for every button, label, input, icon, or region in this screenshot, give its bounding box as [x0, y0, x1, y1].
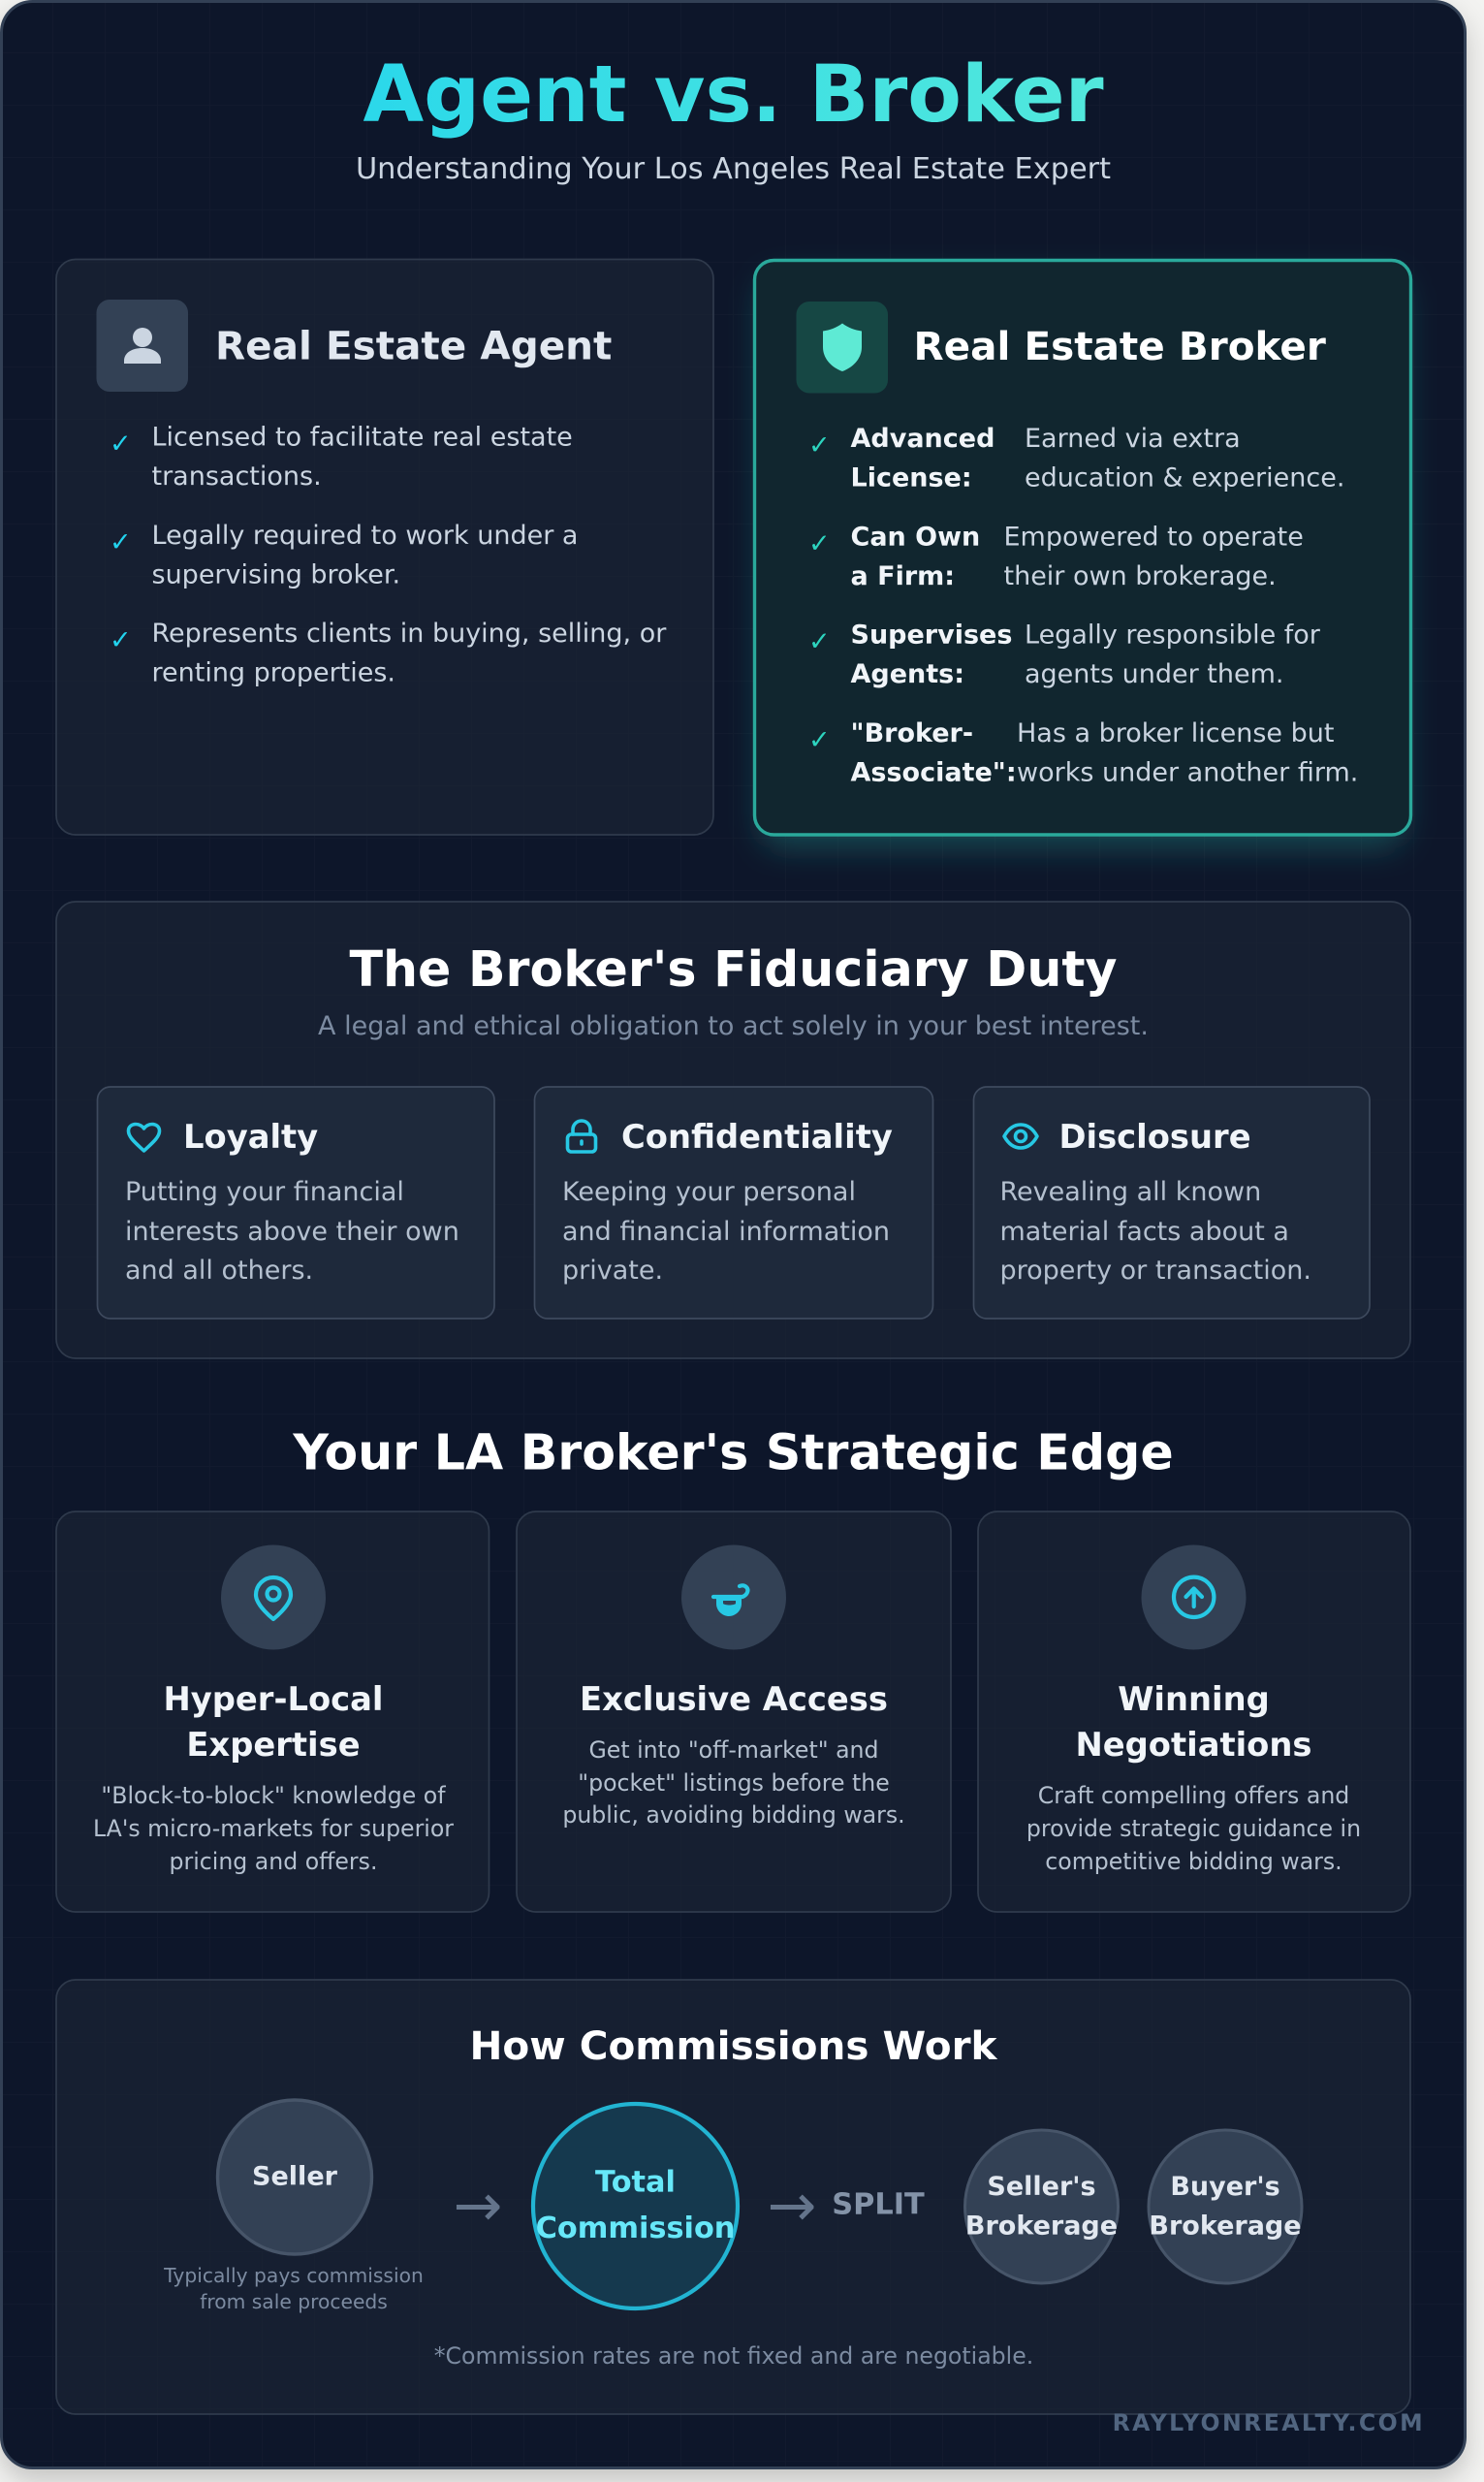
agent list: ✓ [110, 429, 132, 460]
agent list: Represents clients in buying, selling, or [151, 619, 667, 649]
icon: eye [1004, 1125, 1037, 1148]
broker list [808, 424, 1358, 787]
card: hyper-local expertise: Hyper-Local [163, 1680, 384, 1718]
website footer: RAYLYONREALTY.COM [1113, 2409, 1425, 2436]
agent list: supervising broker. [151, 559, 400, 589]
node: buyer's brokerage [1149, 2130, 1302, 2283]
card: disclosure: property or transaction. [1000, 1256, 1311, 1286]
card: hyper-local expertise: "Block-to-block" knowledge of [101, 1782, 446, 1809]
icon: bowl [681, 1545, 786, 1650]
card: confidentiality: Keeping your personal [562, 1177, 856, 1207]
subtitle: Understanding Your Los Angeles Real Estate Expert [356, 152, 1111, 186]
agent list: transactions. [151, 461, 322, 492]
card: hyper-local expertise: Expertise [186, 1726, 361, 1764]
arrow: total to split: → [768, 2172, 816, 2240]
icon: lock [568, 1121, 595, 1152]
node: seller: Seller [252, 2162, 338, 2191]
broker list: Can Own [851, 522, 980, 552]
node: total commission [533, 2104, 738, 2308]
broker list: works under another firm. [1017, 757, 1358, 787]
arrow: seller to total: → [454, 2172, 502, 2240]
card: disclosure: Revealing all known [1000, 1177, 1261, 1207]
card: confidentiality [535, 1087, 932, 1319]
agent heading: Real Estate Agent [215, 322, 612, 368]
agent list: ✓ [110, 625, 132, 655]
node: buyer's brokerage: Brokerage [1149, 2211, 1302, 2242]
icon: map pin [221, 1545, 326, 1650]
card: disclosure: Disclosure [1058, 1118, 1251, 1156]
card: exclusive access: Get into "off-market" and [589, 1736, 878, 1764]
node: seller: Typically pays commission [163, 2264, 424, 2287]
node: seller's brokerage: Brokerage [965, 2211, 1118, 2242]
fiduciary subtitle: A legal and ethical obligation to act solely in your best interest. [318, 1011, 1149, 1041]
card: disclosure: material facts about a [1000, 1217, 1289, 1247]
broker list: their own brokerage. [1004, 561, 1277, 591]
broker list: Supervises [851, 620, 1012, 650]
node: seller [163, 2100, 424, 2313]
broker list: Advanced [851, 424, 995, 454]
broker list: ✓ [808, 528, 831, 558]
broker list: License: [851, 463, 972, 493]
broker list: "Broker- [851, 718, 973, 748]
card: loyalty [97, 1087, 494, 1319]
card: hyper-local expertise: pricing and offers. [170, 1848, 377, 1875]
commission note: *Commission rates are not fixed and are negotiable. [434, 2342, 1033, 2370]
card: hyper-local expertise [56, 1511, 489, 1912]
broker list: ✓ [808, 626, 831, 657]
icon: up arrow circle [1142, 1545, 1247, 1650]
card: exclusive access: public, avoiding bidding wars. [562, 1801, 905, 1829]
card: exclusive access: "pocket" listings before the [578, 1769, 890, 1797]
broker list: agents under them. [1025, 659, 1283, 689]
node: seller: from sale proceeds [200, 2290, 388, 2313]
panel: real estate broker [754, 260, 1411, 848]
agent list: ✓ [110, 527, 132, 557]
card: winning negotiations: competitive bidding wars. [1045, 1848, 1342, 1875]
agent list [110, 423, 667, 688]
card: exclusive access: Exclusive Access [580, 1680, 888, 1718]
panel: fiduciary duty [56, 902, 1410, 1358]
card: loyalty: Loyalty [183, 1118, 318, 1156]
card: confidentiality: private. [562, 1256, 663, 1286]
icon: heart [128, 1125, 159, 1151]
panel: real estate agent [56, 260, 713, 835]
node: total commission: Commission [536, 2212, 735, 2245]
card: confidentiality: Confidentiality [621, 1118, 893, 1156]
card: loyalty: Putting your financial [125, 1177, 404, 1207]
icon: person [97, 300, 188, 392]
card: exclusive access [517, 1511, 951, 1912]
card: loyalty: interests above their own [125, 1217, 459, 1247]
broker list: Earned via extra [1025, 424, 1241, 454]
broker list: ✓ [808, 725, 831, 755]
card: winning negotiations: Negotiations [1076, 1726, 1311, 1764]
fiduciary heading: The Broker's Fiduciary Duty [349, 940, 1118, 998]
panel: how commissions work [56, 1980, 1410, 2414]
broker list: ✓ [808, 430, 831, 461]
node: total commission: Total [595, 2166, 676, 2199]
card: disclosure [973, 1087, 1370, 1319]
card: winning negotiations: Craft compelling offers and [1038, 1782, 1349, 1809]
card: winning negotiations: provide strategic guidance in [1026, 1815, 1361, 1842]
broker list: a Firm: [851, 561, 955, 591]
broker list: Has a broker license but [1017, 718, 1334, 748]
card: hyper-local expertise: LA's micro-markets for superior [93, 1815, 454, 1842]
split label: SPLIT [832, 2187, 925, 2222]
broker list: Legally responsible for [1025, 620, 1321, 650]
broker list: education & experience. [1025, 463, 1344, 493]
title: Agent vs. Broker [363, 49, 1104, 141]
agent list: renting properties. [151, 657, 395, 688]
icon: shield [797, 302, 888, 394]
card: loyalty: and all others. [125, 1256, 313, 1286]
card: winning negotiations [978, 1511, 1410, 1912]
card: confidentiality: and financial information [562, 1217, 890, 1247]
broker list: Agents: [851, 659, 964, 689]
commissions heading: How Commissions Work [470, 2022, 998, 2069]
broker list: Associate": [851, 757, 1017, 787]
agent list: Licensed to facilitate real estate [151, 423, 573, 452]
section heading: strategic edge: Your LA Broker's Strategic Edge [292, 1423, 1174, 1481]
agent list: Legally required to work under a [151, 521, 578, 551]
card: winning negotiations: Winning [1118, 1680, 1270, 1718]
broker heading: Real Estate Broker [913, 323, 1326, 369]
node: seller's brokerage [965, 2130, 1119, 2283]
node: seller's brokerage: Seller's [987, 2172, 1096, 2202]
broker list: Empowered to operate [1004, 522, 1304, 552]
node: buyer's brokerage: Buyer's [1170, 2172, 1280, 2202]
